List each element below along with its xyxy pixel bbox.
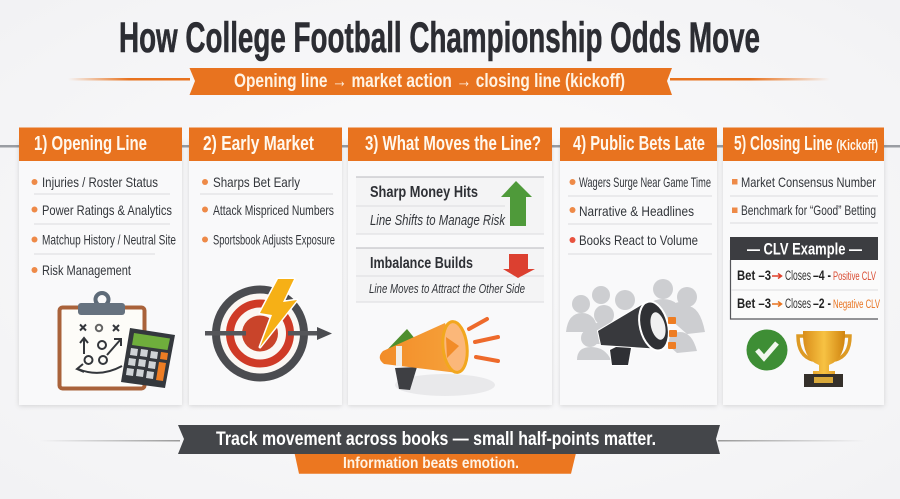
panel: early market — [189, 128, 342, 405]
footer banner: Track movement across books — small half-points matter. — [216, 428, 656, 450]
panel: early market: 2) Early Market — [203, 133, 314, 155]
panel: closing line: 5) Closing Line (Kickoff) — [734, 133, 878, 155]
panel: opening line: 1) Opening Line — [34, 133, 147, 155]
panel: public bets late — [560, 128, 717, 405]
icon: crowd with megaphone — [566, 279, 705, 365]
panel: public bets late: Narrative & Headlines — [579, 203, 694, 219]
arrow: bet to close, positive — [772, 274, 782, 278]
panel: public bets late: Books React to Volume — [579, 232, 698, 248]
panel: what moves the line — [348, 128, 552, 405]
footer banner — [40, 425, 865, 474]
icon: green check — [746, 330, 788, 370]
panel: what moves the line: Imbalance Builds — [370, 255, 473, 272]
panel: opening line: Power Ratings & Analytics — [42, 202, 172, 218]
CLV example table: Bet –3 — [737, 267, 771, 283]
panel: early market: Sportsbook Adjusts Exposure — [213, 232, 335, 248]
timeline rail — [0, 145, 900, 148]
panel: public bets late: Wagers Surge Near Game Time — [579, 174, 711, 190]
CLV example table: Closes — [785, 296, 811, 311]
icon: trophy — [798, 331, 850, 387]
subtitle ribbon: Opening line → market action → closing line (kickoff) — [234, 71, 625, 92]
panel: opening line: Injuries / Roster Status — [42, 174, 158, 190]
panel: what moves the line: 3) What Moves the Line? — [365, 133, 541, 155]
CLV example table: –4 - — [813, 267, 831, 283]
panel: closing line — [723, 128, 884, 405]
panel: what moves the line: Line Shifts to Manage Risk — [370, 213, 506, 229]
icon: green up arrow — [501, 181, 532, 226]
panel: early market: Sharps Bet Early — [213, 174, 300, 190]
CLV example table — [730, 237, 880, 319]
CLV example table: — CLV Example — — [747, 240, 862, 258]
panel: what moves the line: Line Moves to Attract the Other Side — [369, 281, 525, 296]
panel: early market: Attack Mispriced Numbers — [213, 202, 334, 218]
icon: orange megaphone — [380, 319, 498, 396]
CLV example table: Closes — [785, 268, 811, 283]
panel: what moves the line: Sharp Money Hits — [370, 184, 478, 201]
CLV example table: –2 - — [813, 295, 831, 311]
panel: opening line — [19, 128, 182, 405]
icon: clipboard and calculator — [60, 293, 175, 388]
arrow: bet to close, negative — [772, 302, 782, 306]
icon: target with lightning bolt — [205, 279, 332, 378]
footer banner: Information beats emotion. — [343, 455, 519, 472]
panel: public bets late: 4) Public Bets Late — [573, 133, 705, 155]
CLV example table: Bet –3 — [737, 295, 771, 311]
CLV example table: Positive CLV — [833, 271, 876, 283]
subtitle ribbon — [68, 68, 830, 95]
icon: red down arrow — [503, 254, 535, 278]
panel: opening line: Matchup History / Neutral Site — [42, 232, 176, 248]
panel: opening line: Risk Management — [42, 262, 131, 278]
